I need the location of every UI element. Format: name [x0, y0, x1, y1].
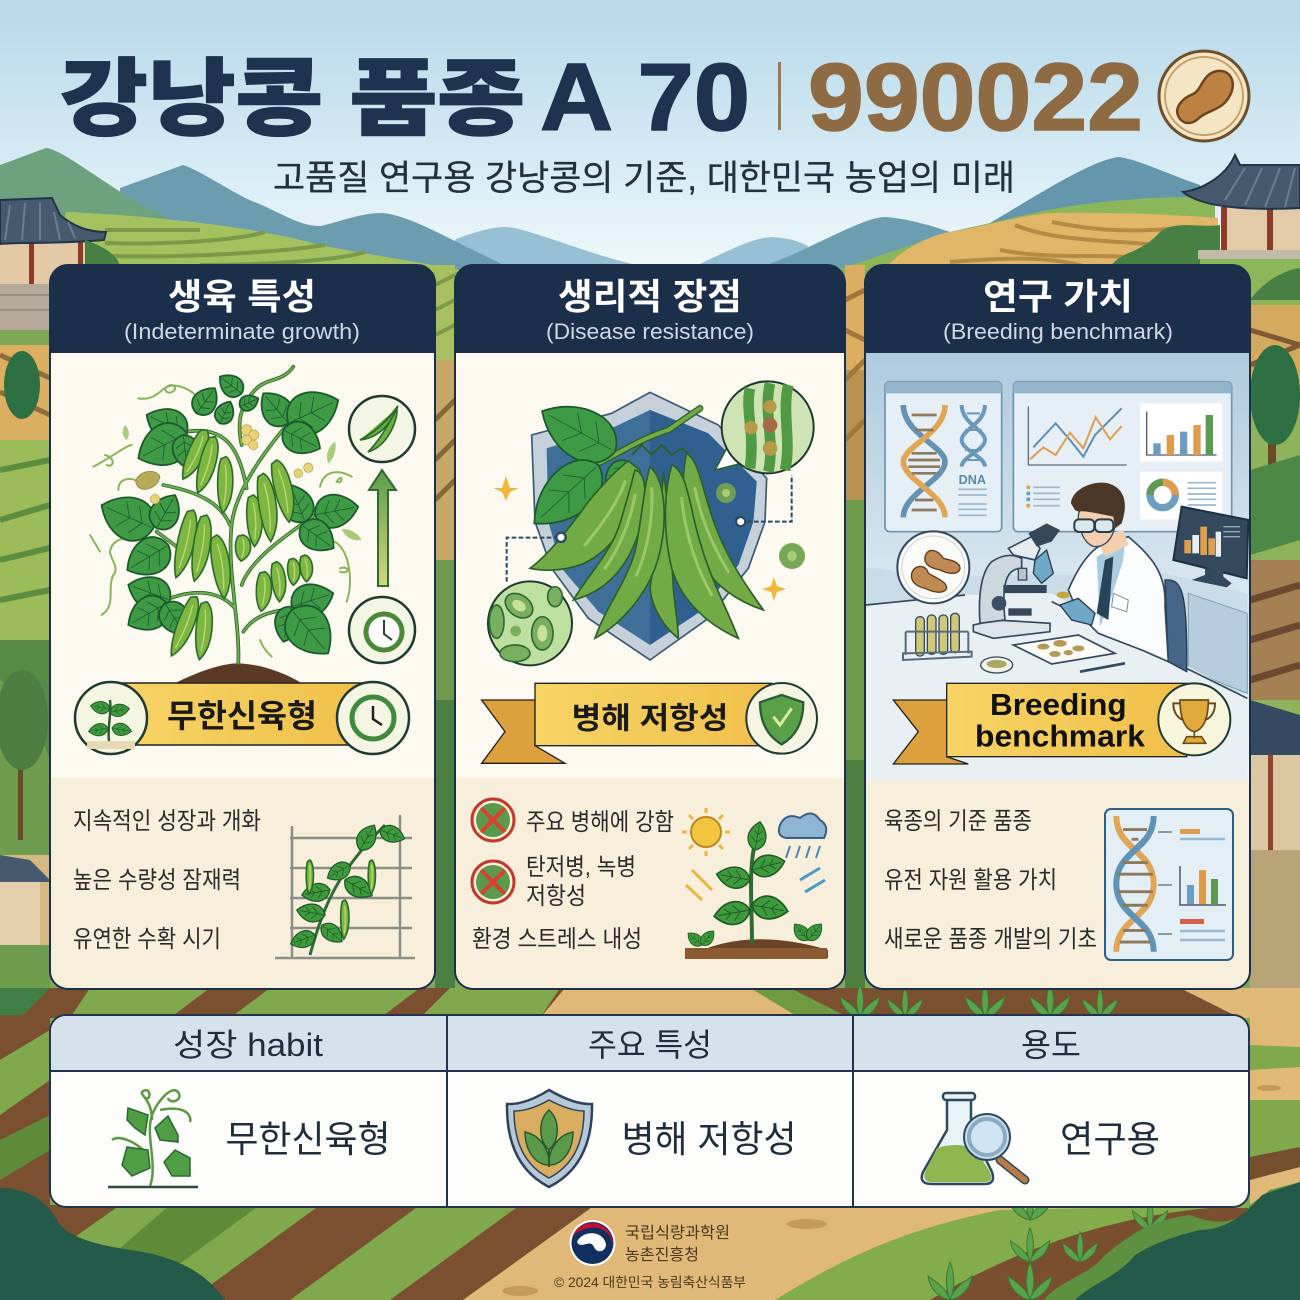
- text: research bullets: 유전 자원 활용 가치: [884, 867, 1057, 894]
- subtitle: 고품질 연구용 강낭콩의 기준, 대한민국 농업의 미래: [273, 159, 1015, 198]
- table header: key trait: 주요 특성: [588, 1027, 712, 1063]
- heading: physiology: [546, 276, 754, 344]
- heading: physiology: (Disease resistance): [546, 319, 754, 344]
- title: 990022: [808, 44, 1143, 151]
- footer: organisation text: 농촌진흥청: [625, 1246, 699, 1264]
- text: disease bullets: [472, 799, 674, 953]
- illustration: microscope: [973, 523, 1060, 638]
- illustration: trellis: [275, 815, 415, 958]
- heading: research: [943, 276, 1173, 344]
- table header: use: 용도: [1021, 1027, 1081, 1063]
- icon: bean magnifier: [897, 531, 969, 603]
- illustration: DNA screen: [885, 382, 1002, 532]
- callout: pod cross-section: [715, 381, 814, 473]
- banner: breeding benchmark: benchmark: [975, 720, 1146, 754]
- heading: physiology: 생리적 장점: [558, 276, 742, 317]
- text: disease bullets: 주요 병해에 강함: [526, 809, 674, 836]
- lower gap: [0, 988, 1300, 1018]
- side strips: [0, 330, 50, 350]
- text: disease bullets: 환경 스트레스 내성: [472, 926, 642, 953]
- panel: research value: [865, 265, 1250, 989]
- heading: growth: (Indeterminate growth): [124, 319, 360, 344]
- illustration: DNA screen: DNA: [959, 473, 986, 487]
- heading: growth: 생육 특성: [168, 276, 316, 317]
- panel: growth characteristics: [50, 265, 435, 989]
- banner: disease resistance: [482, 683, 817, 763]
- value: indeterminate: 무한신육형: [226, 1119, 390, 1160]
- illustration: bean plant: [90, 367, 362, 683]
- text: disease bullets: 저항성: [526, 883, 586, 910]
- panel: physiological advantage: [455, 265, 845, 989]
- icon: bean badge: [1159, 51, 1249, 141]
- text: research bullets: 새로운 품종 개발의 기초: [884, 926, 1097, 953]
- value: disease resistance: 병해 저항성: [622, 1119, 796, 1160]
- footer: organisation text: [554, 1224, 746, 1290]
- heading: research: (Breeding benchmark): [943, 319, 1173, 344]
- callout: cell view: [488, 475, 792, 665]
- banner: indeterminate: 무한신육형: [167, 698, 317, 734]
- title: A 70: [540, 44, 750, 151]
- text: disease bullets: 탄저병, 녹병: [526, 854, 636, 881]
- table header: growth habit: 성장 habit: [173, 1027, 323, 1063]
- text: growth bullets: [73, 808, 261, 953]
- value: research use: 연구용: [1060, 1119, 1160, 1160]
- footer: organisation text: 국립식량과학원: [625, 1224, 730, 1242]
- illustration: test tubes: [903, 613, 972, 660]
- illustration: DNA report: [1105, 809, 1233, 960]
- banner: indeterminate: [75, 682, 409, 754]
- icon: sprout: [108, 1090, 198, 1187]
- heading: growth: [124, 276, 360, 344]
- text: growth bullets: 지속적인 성장과 개화: [73, 808, 261, 835]
- illustration: plant with weather: [682, 808, 828, 959]
- icon: flask and magnifier: [922, 1093, 1025, 1184]
- table: summary: [50, 1015, 1249, 1207]
- title: 강낭콩 품종: [60, 52, 525, 146]
- illustration: scientist: [1033, 483, 1187, 672]
- text: research bullets: 육종의 기준 품종: [884, 808, 1032, 835]
- icon: sparkles and pathogens: [493, 476, 805, 601]
- banner: disease resistance: 병해 저항성: [572, 702, 728, 735]
- bottom fields: [0, 1205, 1300, 1300]
- banner: breeding benchmark: [893, 683, 1230, 764]
- text: growth bullets: 유연한 수확 시기: [73, 926, 221, 953]
- arrow: upward growth: [369, 470, 396, 586]
- illustration: bean tray: [981, 635, 1125, 673]
- hanok right: [1183, 155, 1300, 259]
- hanok left: [0, 198, 120, 330]
- icon: shield leaf: [507, 1090, 592, 1187]
- footer: government emblem: [570, 1220, 616, 1266]
- title: [60, 44, 1143, 151]
- banner: breeding benchmark: Breeding: [990, 688, 1127, 722]
- footer: organisation text: © 2024 대한민국 농림축산식품부: [554, 1275, 746, 1290]
- illustration: monitor: [1173, 507, 1248, 587]
- chart: analysis screen: [1013, 382, 1232, 532]
- text: growth bullets: 높은 수량성 잠재력: [73, 867, 241, 894]
- illustration: shield and pods: [519, 390, 767, 660]
- icon: pod circle: [349, 396, 415, 462]
- illustration: lab desk: [866, 568, 1247, 780]
- text: research bullets: [884, 808, 1097, 953]
- icon: clock growth: [349, 597, 415, 663]
- heading: research: 연구 가치: [983, 276, 1133, 317]
